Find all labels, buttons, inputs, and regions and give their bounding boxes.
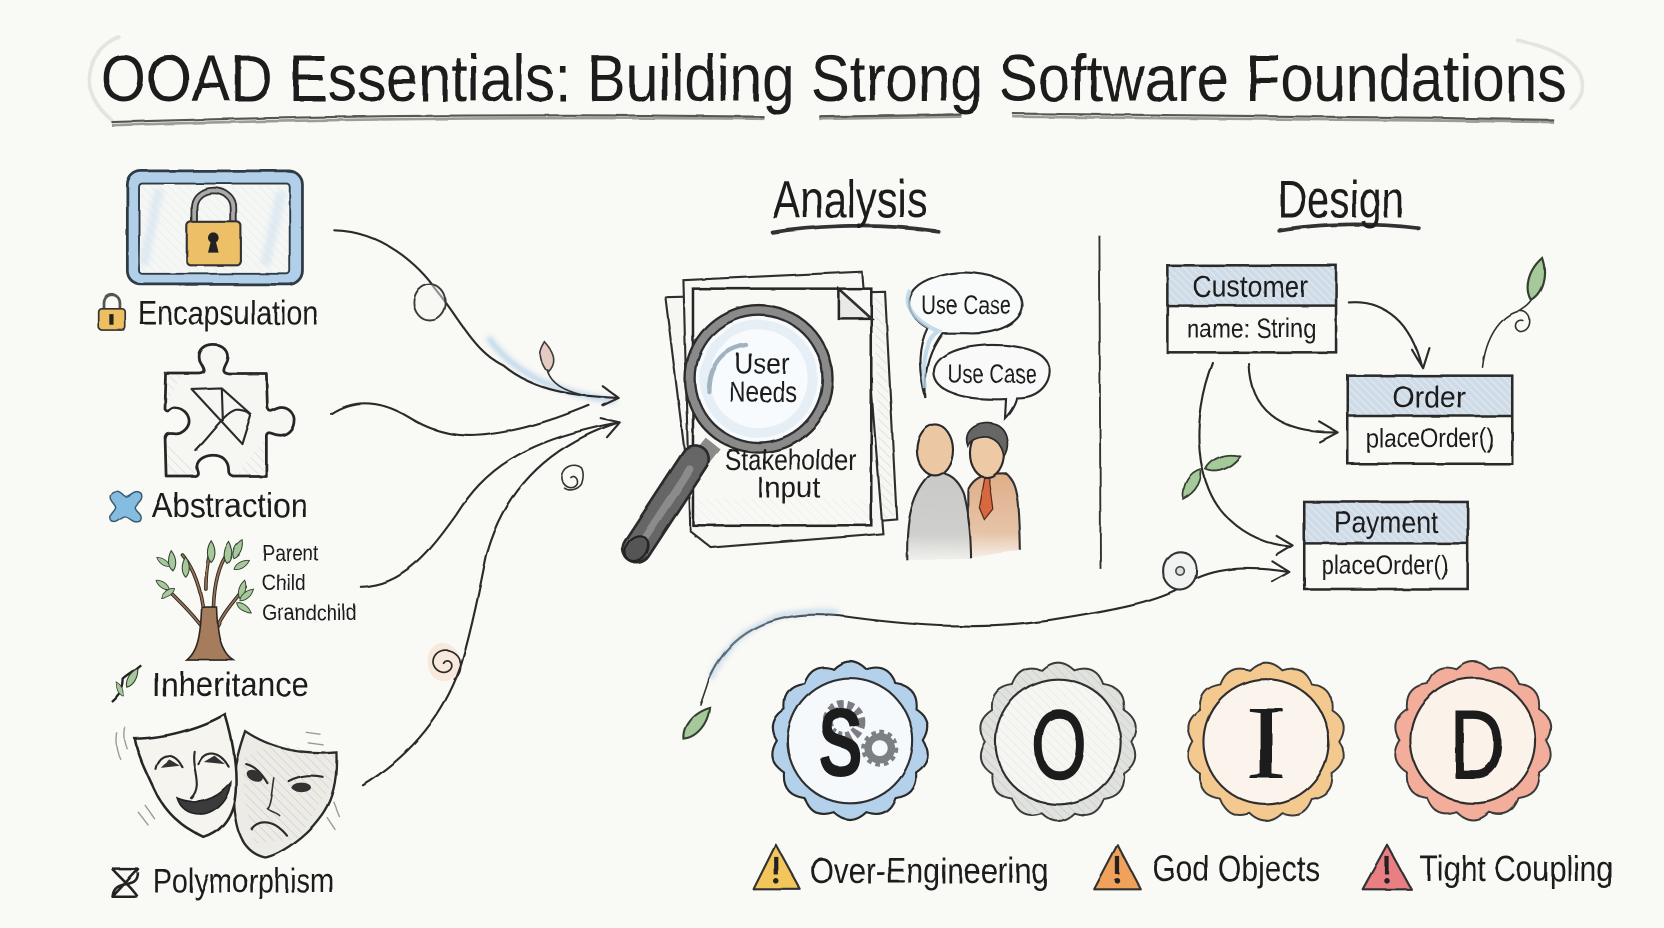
icon: theatre masks — [116, 714, 340, 857]
badge: D — [1395, 662, 1551, 820]
speech bubble: use case 1: Use Case — [921, 290, 1011, 320]
class: Order — [1348, 376, 1512, 464]
arrow: encapsulation flow — [334, 230, 619, 405]
speech bubble: use case 1 — [908, 273, 1022, 398]
warning: Over-Engineering: Over-Engineering — [810, 850, 1048, 891]
icon: small sprout — [111, 665, 141, 701]
icon: family tree — [155, 538, 255, 660]
warning: Over-Engineering — [753, 845, 1048, 891]
icon: puzzle piece — [164, 345, 294, 476]
class: Customer: name: String — [1186, 313, 1316, 343]
heading: Design: Design — [1278, 171, 1404, 230]
panel: anti-patterns — [753, 845, 1613, 891]
badge: S — [772, 662, 928, 820]
arrow: polymorphism flow — [363, 418, 620, 785]
class: Order: placeOrder() — [1366, 423, 1494, 453]
arrow: customer to order lower — [1249, 364, 1337, 441]
magnifying glass — [620, 305, 833, 566]
warning: Tight Coupling: Tight Coupling — [1420, 848, 1613, 889]
badge: O — [980, 663, 1136, 821]
speech bubble: use case 2: Use Case — [948, 359, 1037, 389]
icon: small mixed shapes — [112, 869, 138, 897]
arrow: connector to payment — [678, 552, 1289, 743]
panel: analysis illustration — [620, 272, 1050, 566]
two stakeholders — [907, 423, 1020, 560]
label: Grandchild: Grandchild — [262, 600, 357, 625]
panel: encapsulation — [99, 171, 318, 333]
warning: God Objects: God Objects — [1152, 848, 1320, 889]
badge: S: S — [818, 688, 863, 797]
class: Customer — [1167, 265, 1336, 352]
class: Order: Order — [1392, 380, 1466, 415]
badge: I — [1188, 663, 1344, 821]
label: Child: Child — [262, 570, 306, 595]
label: User Needs: User — [734, 348, 790, 381]
vine: sprout above order — [1483, 257, 1550, 367]
label: Stakeholder Input: Input — [757, 472, 821, 505]
arrow: abstraction flow — [331, 403, 589, 435]
label: Inheritance: Inheritance — [152, 666, 309, 704]
heading: Analysis: Analysis — [773, 171, 928, 230]
class: Customer: Customer — [1193, 269, 1308, 304]
icon: lock in frame — [127, 171, 302, 284]
panel: SOLID badges — [772, 662, 1551, 821]
icon: small lock — [99, 295, 125, 330]
label: Stakeholder Input — [725, 444, 856, 505]
warning: God Objects — [1094, 845, 1320, 889]
panel: inheritance — [111, 538, 357, 704]
class: Payment — [1304, 502, 1468, 589]
panel: polymorphism — [112, 714, 340, 900]
class: Payment: Payment — [1334, 505, 1438, 540]
flow arrows into analysis — [331, 230, 620, 785]
panel: design uml — [1167, 257, 1550, 589]
label: User Needs — [729, 348, 797, 409]
icon: small blue shape — [110, 491, 142, 522]
class: Payment: placeOrder() — [1321, 550, 1449, 580]
label: Abstraction: Abstraction — [152, 487, 308, 525]
arrow: customer to payment — [1199, 363, 1293, 555]
divider — [1099, 236, 1100, 569]
label: Stakeholder Input: Stakeholder — [725, 444, 856, 477]
warning: Tight Coupling — [1363, 845, 1613, 889]
label: User Needs: Needs — [729, 376, 797, 409]
vine with leaves — [1178, 450, 1242, 502]
badge: O: O — [1032, 690, 1087, 799]
document stack — [665, 272, 897, 548]
arrow: customer to order — [1349, 302, 1429, 368]
badge: D: D — [1450, 690, 1505, 799]
label: Parent: Parent — [262, 540, 319, 565]
speech bubble: use case 2 — [934, 345, 1050, 418]
badge: I: I — [1245, 683, 1287, 801]
panel: abstraction — [110, 345, 308, 525]
arrow: inheritance flow — [361, 422, 619, 587]
label: Encapsulation: Encapsulation — [138, 295, 318, 333]
label: Polymorphism: Polymorphism — [153, 862, 334, 900]
